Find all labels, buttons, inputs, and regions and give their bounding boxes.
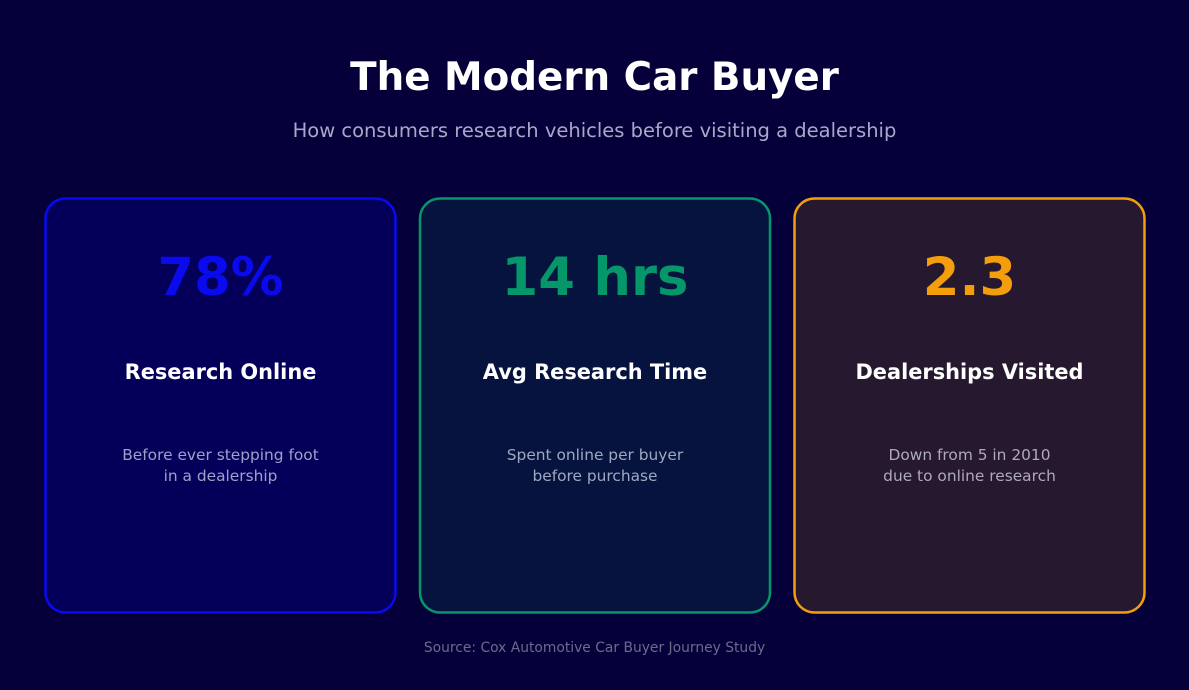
description: research time: Spent online per buyer xyxy=(507,446,683,464)
description: research online: Before ever stepping foot xyxy=(122,446,319,464)
description: research time xyxy=(507,446,684,485)
stat: 14 hrs: 14 hrs xyxy=(502,247,688,308)
source note: Source: Cox Automotive Car Buyer Journey Study xyxy=(424,640,765,656)
description: dealerships visited: Down from 5 in 2010 xyxy=(888,446,1050,464)
stat: 2.3: 2.3 xyxy=(923,247,1016,308)
description: research online xyxy=(122,446,319,485)
panel: dealerships visited xyxy=(793,197,1146,614)
label: avg research time: Avg Research Time xyxy=(483,360,707,384)
stat: 78%: 78% xyxy=(157,247,284,308)
description: dealerships visited xyxy=(883,446,1056,485)
label: dealerships visited: Dealerships Visited xyxy=(855,360,1084,384)
description: research online: in a dealership xyxy=(164,467,277,485)
label: research online: Research Online xyxy=(125,360,316,384)
description: research time: before purchase xyxy=(532,467,658,485)
subtitle: How consumers research vehicles before visiting a dealership xyxy=(293,119,896,142)
panel: research online xyxy=(44,197,397,614)
panel: research time xyxy=(418,197,772,614)
title: The Modern Car Buyer xyxy=(350,55,839,100)
description: dealerships visited: due to online research xyxy=(883,467,1056,485)
